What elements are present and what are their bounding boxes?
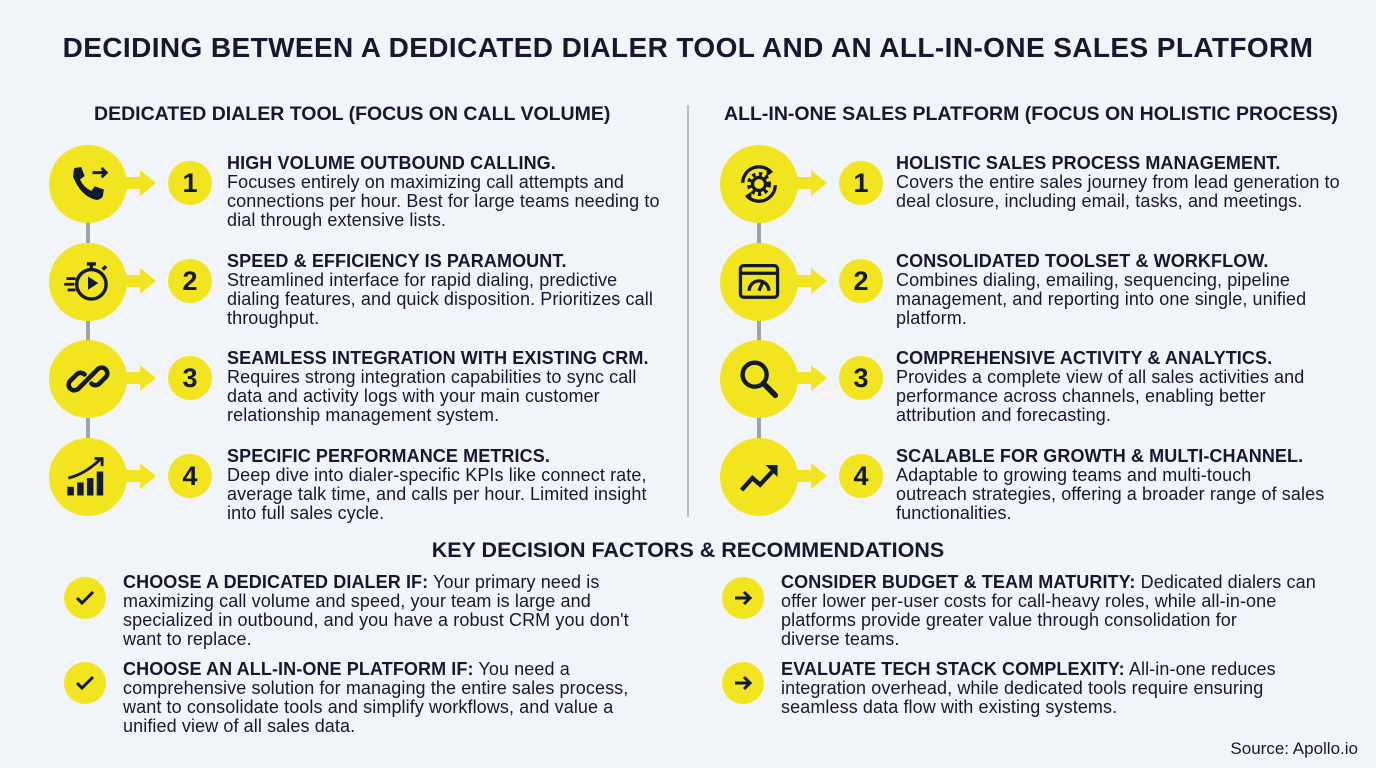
text 3: data and activity logs with your main customer [227, 386, 600, 406]
recommendation: budget [722, 572, 1316, 649]
text 2: Streamlined interface for rapid dialing, predictive [227, 270, 617, 290]
text 1: Covers the entire sales journey from lead generation to [896, 172, 1340, 192]
step 2 [720, 243, 1306, 328]
recommendation: all-in-one: comprehensive solution for managing the entire sales process, [123, 678, 628, 698]
text 4 [896, 446, 1324, 523]
text 4: Deep dive into dialer-specific KPIs like connect rate, [227, 465, 647, 485]
step 1 [49, 145, 660, 230]
recommendation: tech stack: EVALUATE TECH STACK COMPLEXITY: All-in-one reduces [781, 659, 1276, 679]
heading: all-in-one: ALL-IN-ONE SALES PLATFORM (FOCUS ON HOLISTIC PROCESS) [724, 103, 1338, 125]
number 2: 2 [853, 266, 869, 296]
number 2 [168, 259, 212, 303]
text 2: SPEED & EFFICIENCY IS PARAMOUNT. [227, 251, 567, 271]
text 4: outreach strategies, offering a broader range of sales [896, 484, 1324, 504]
number 1 [839, 161, 883, 205]
step 4 [49, 438, 647, 523]
number 3: 3 [853, 362, 869, 392]
divider [687, 105, 689, 517]
number 1: 1 [182, 168, 198, 198]
title: DECIDING BETWEEN A DEDICATED DIALER TOOL AND AN ALL-IN-ONE SALES PLATFORM [63, 32, 1313, 63]
number 4 [168, 454, 212, 498]
text 4: average talk time, and calls per hour. Limited insight [227, 484, 647, 504]
text 3 [896, 348, 1304, 425]
text 3 [227, 348, 649, 425]
step 2 [49, 243, 653, 328]
icon: stopwatch [49, 243, 127, 321]
recommendation: all-in-one: unified view of all sales data. [123, 716, 355, 736]
icon: dashboard window [720, 243, 798, 321]
text 2: management, and reporting into one single, unified [896, 289, 1306, 309]
heading: key decision factors: KEY DECISION FACTORS & RECOMMENDATIONS [432, 538, 944, 562]
text 1: HOLISTIC SALES PROCESS MANAGEMENT. [896, 153, 1280, 173]
step 4 [720, 438, 1324, 523]
recommendation: dedicated dialer: CHOOSE A DEDICATED DIALER IF: Your primary need is [123, 572, 599, 592]
number 4: 4 [182, 460, 198, 490]
recommendation: tech stack: seamless data flow with existing systems. [781, 697, 1117, 717]
recommendation: dedicated dialer: maximizing call volume and speed, your team is large and [123, 591, 591, 611]
icon: arrow [722, 577, 764, 619]
step 1 [720, 145, 1340, 223]
step 3 [49, 340, 649, 425]
recommendation: budget: platforms provide greater value through consolidation for [781, 610, 1237, 630]
source: Source: Apollo.io [1230, 739, 1358, 758]
recommendation: all-in-one [64, 659, 628, 736]
icon: check [64, 662, 106, 704]
icon: phone [49, 145, 127, 223]
text 1: HIGH VOLUME OUTBOUND CALLING. [227, 153, 556, 173]
panel: all-in-one steps [720, 145, 1340, 523]
recommendation: dedicated dialer: specialized in outbound, and you have a robust CRM you don't [123, 610, 629, 630]
text 4 [227, 446, 647, 523]
number 2: 2 [182, 266, 198, 296]
text 1: Focuses entirely on maximizing call attempts and [227, 172, 624, 192]
text 3: COMPREHENSIVE ACTIVITY & ANALYTICS. [896, 348, 1272, 368]
recommendation: all-in-one: CHOOSE AN ALL-IN-ONE PLATFORM IF: You need a [123, 659, 570, 679]
recommendation: all-in-one: want to consolidate tools and simplify workflows, and value a [123, 697, 613, 717]
recommendation: budget: CONSIDER BUDGET & TEAM MATURITY: Dedicated dialers can [781, 572, 1316, 592]
text 2: Combines dialing, emailing, sequencing, pipeline [896, 270, 1290, 290]
text 4: functionalities. [896, 503, 1012, 523]
number 3: 3 [182, 362, 198, 392]
heading: dedicated dialer: DEDICATED DIALER TOOL (FOCUS ON CALL VOLUME) [94, 103, 610, 125]
text 1: deal closure, including email, tasks, and meetings. [896, 191, 1302, 211]
text 2: CONSOLIDATED TOOLSET & WORKFLOW. [896, 251, 1269, 271]
text 3: relationship management system. [227, 405, 499, 425]
recommendation: budget: diverse teams. [781, 629, 899, 649]
text 1: connections per hour. Best for large teams needing to [227, 191, 660, 211]
text 4: Adaptable to growing teams and multi-touch [896, 465, 1251, 485]
text 2: platform. [896, 308, 967, 328]
number 3 [839, 356, 883, 400]
icon: gear cycle [720, 145, 798, 223]
recommendation: dedicated dialer [64, 572, 629, 649]
number 1: 1 [853, 168, 869, 198]
text 2 [227, 251, 653, 328]
step 3 [720, 340, 1304, 425]
recommendation: tech stack [722, 659, 1276, 717]
text 3: attribution and forecasting. [896, 405, 1111, 425]
number 3 [168, 356, 212, 400]
text 1: dial through extensive lists. [227, 210, 446, 230]
icon: link [49, 340, 127, 418]
panel: dedicated dialer steps [49, 145, 660, 523]
recommendation: dedicated dialer: want to replace. [123, 629, 252, 649]
text 3: SEAMLESS INTEGRATION WITH EXISTING CRM. [227, 348, 649, 368]
text 3: performance across channels, enabling better [896, 386, 1266, 406]
recommendation: budget: offer lower per-user costs for call-heavy roles, while all-in-one [781, 591, 1276, 611]
text 3: Requires strong integration capabilities to sync call [227, 367, 637, 387]
icon: arrow [722, 662, 764, 704]
icon: check [64, 577, 106, 619]
icon: bar chart [49, 438, 127, 516]
recommendation: tech stack: integration overhead, while dedicated tools require ensuring [781, 678, 1263, 698]
number 4 [839, 454, 883, 498]
text 2: dialing features, and quick disposition. Prioritizes call [227, 289, 653, 309]
text 1 [896, 153, 1340, 211]
text 1 [227, 153, 660, 230]
text 2 [896, 251, 1306, 328]
icon: trend arrow [720, 438, 798, 516]
text 3: Provides a complete view of all sales activities and [896, 367, 1304, 387]
text 4: SPECIFIC PERFORMANCE METRICS. [227, 446, 550, 466]
number 2 [839, 259, 883, 303]
text 2: throughput. [227, 308, 319, 328]
text 4: into full sales cycle. [227, 503, 384, 523]
number 1 [168, 161, 212, 205]
text 4: SCALABLE FOR GROWTH & MULTI-CHANNEL. [896, 446, 1303, 466]
icon: magnifier [720, 340, 798, 418]
number 4: 4 [853, 460, 869, 490]
